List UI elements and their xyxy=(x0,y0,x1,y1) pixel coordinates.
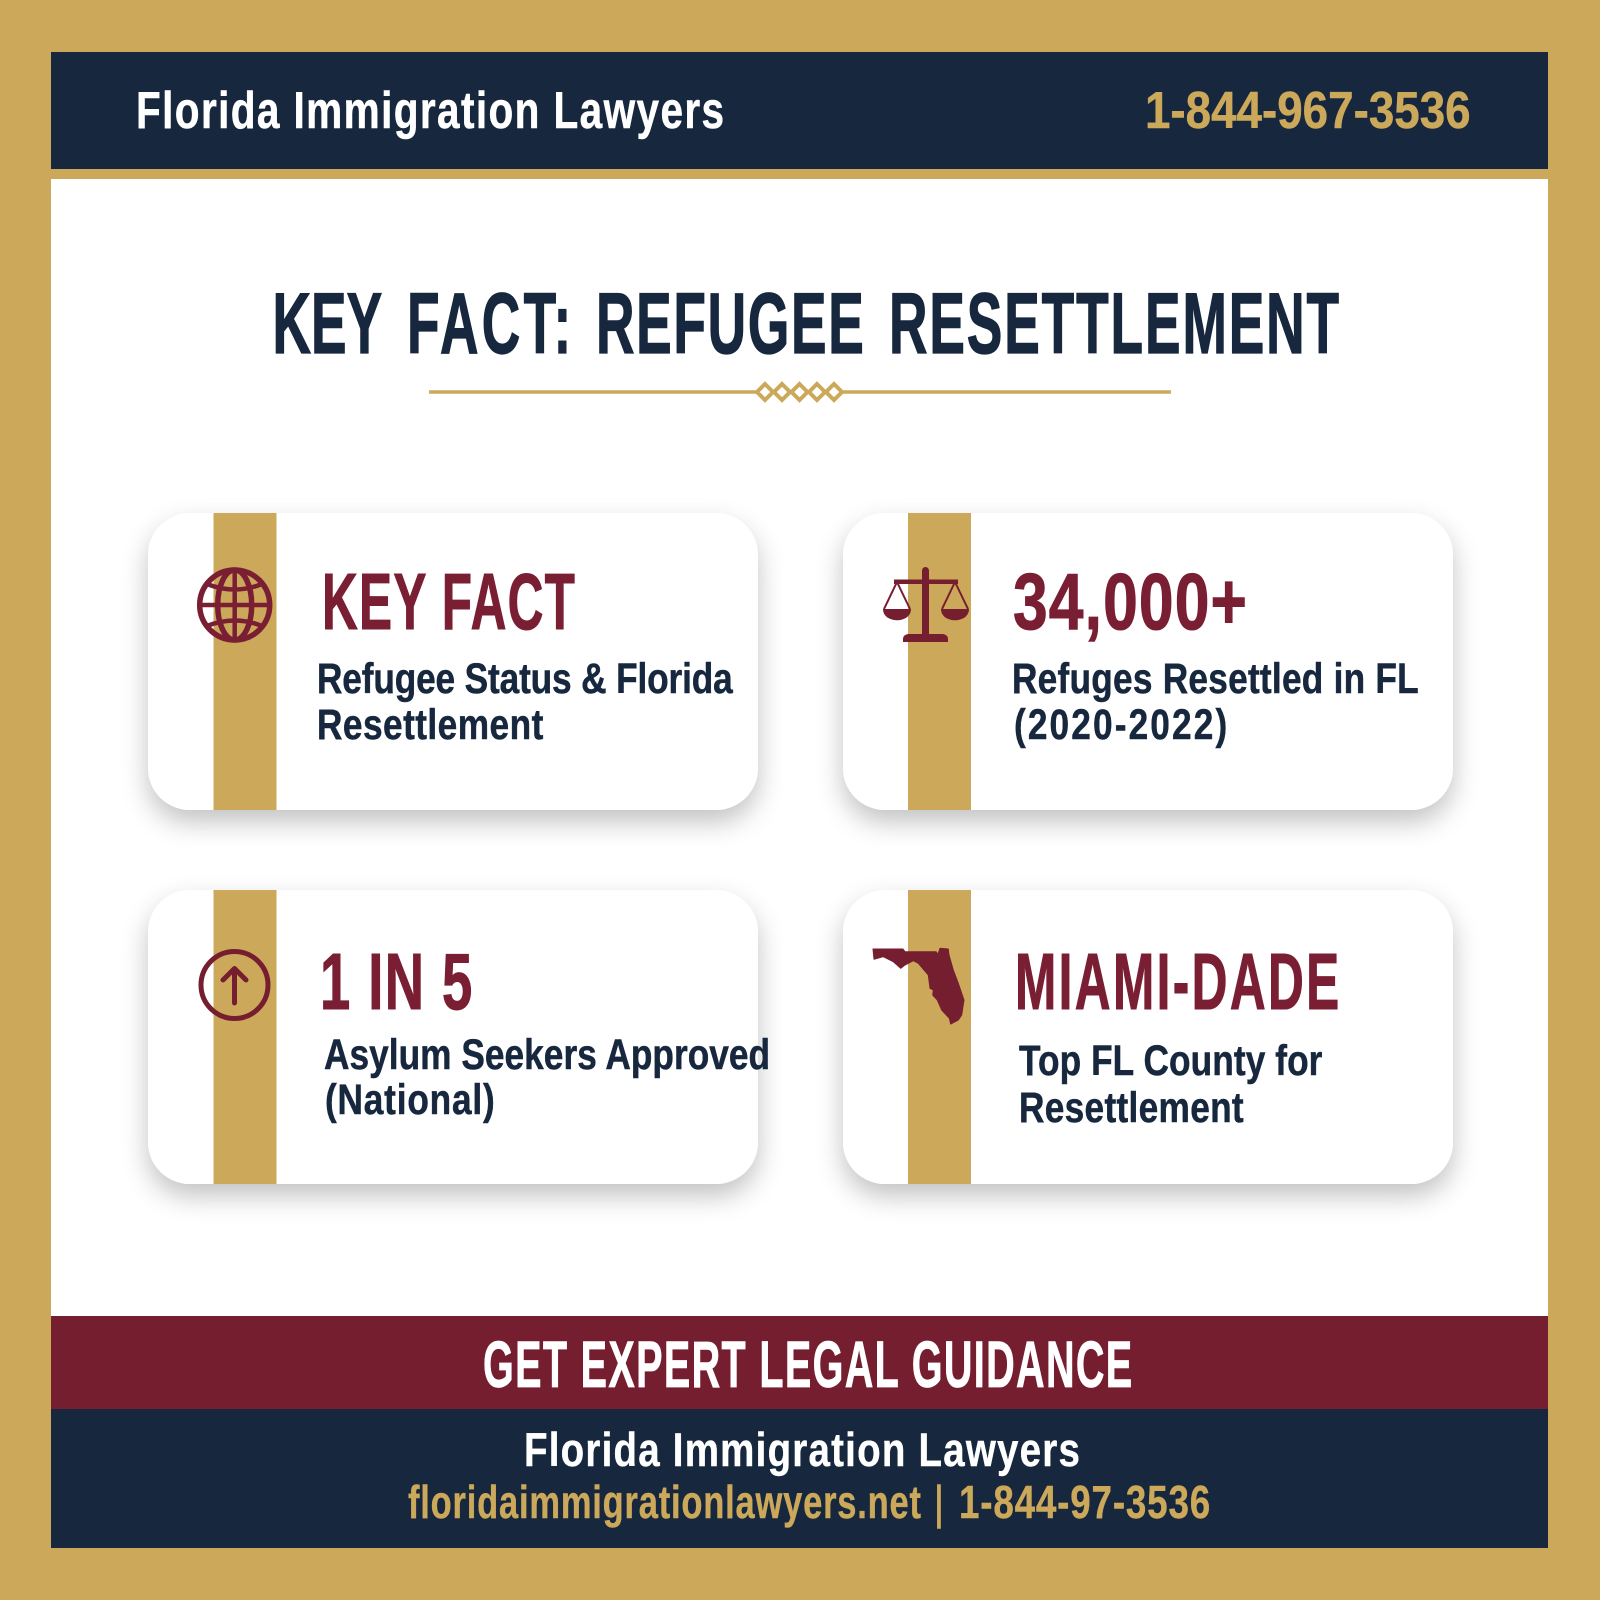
card description: Resettlement xyxy=(317,701,543,749)
card: asylum approvals xyxy=(148,890,770,1184)
call to action banner xyxy=(51,1316,1548,1409)
card description: Top FL County for xyxy=(1019,1037,1322,1085)
main title: FACT: xyxy=(407,276,571,372)
footer website and phone: 1-844-97-3536 xyxy=(959,1476,1210,1528)
card description: (2020-2022) xyxy=(1014,701,1227,749)
gold strip xyxy=(214,513,276,810)
card heading: KEY FACT xyxy=(322,558,575,647)
card: key fact xyxy=(148,513,758,810)
card description xyxy=(317,655,734,749)
main title: KEY xyxy=(272,276,382,372)
card description: Refugee Status & Florida xyxy=(317,655,734,703)
main title xyxy=(272,276,1339,372)
white content area xyxy=(51,179,1548,1319)
icon: globe xyxy=(200,570,270,640)
gold strip xyxy=(214,890,276,1184)
card heading: MIAMI-DADE xyxy=(1015,938,1339,1027)
card description xyxy=(1019,1037,1322,1132)
card description: Asylum Seekers Approved xyxy=(324,1031,770,1079)
card description xyxy=(1012,655,1419,749)
card heading: 1 IN 5 xyxy=(320,938,472,1027)
footer website and phone: | xyxy=(935,1478,943,1529)
icon: up arrow in circle xyxy=(201,952,268,1018)
card description: Resettlement xyxy=(1019,1084,1244,1132)
icon: scales of justice xyxy=(883,567,969,642)
gold strip xyxy=(908,890,971,1184)
card heading: 34,000+ xyxy=(1013,558,1247,647)
footer website and phone: floridaimmigrationlawyers.net xyxy=(408,1476,921,1528)
card: miami-dade xyxy=(843,890,1453,1184)
card description xyxy=(324,1031,770,1124)
footer website and phone xyxy=(408,1476,1210,1529)
main title: RESETTLEMENT xyxy=(889,276,1339,372)
title divider with diamonds xyxy=(429,384,1171,400)
header bar xyxy=(51,52,1548,169)
footer contact block xyxy=(51,1409,1548,1548)
header phone number: 1-844-967-3536 xyxy=(1145,82,1471,140)
footer firm name: Florida Immigration Lawyers xyxy=(524,1424,1080,1477)
gold strip xyxy=(908,513,971,810)
main title: REFUGEE xyxy=(596,276,864,372)
header firm name: Florida Immigration Lawyers xyxy=(136,81,724,139)
card description: (National) xyxy=(325,1076,495,1124)
card: refugees resettled xyxy=(843,513,1453,810)
banner text: GET EXPERT LEGAL GUIDANCE xyxy=(483,1328,1132,1402)
icon: Florida state silhouette xyxy=(873,948,964,1024)
card description: Refuges Resettled in FL xyxy=(1012,655,1419,703)
